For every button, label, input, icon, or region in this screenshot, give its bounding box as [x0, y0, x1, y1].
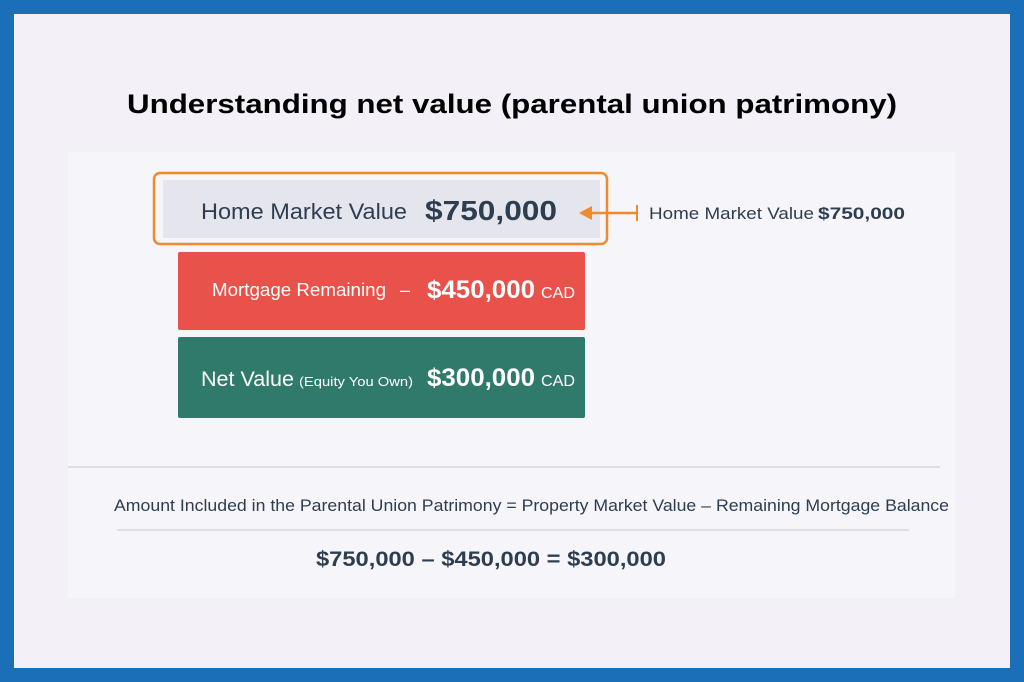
home market value box: [154, 173, 607, 244]
inner panel: [68, 152, 955, 598]
title: Understanding net value (parental union patrimony): [127, 89, 897, 119]
mortgage remaining box: –: [400, 280, 410, 300]
arrow: [579, 205, 637, 221]
net value box: (Equity You Own): [299, 374, 413, 389]
mortgage remaining box: $450,000: [427, 276, 535, 304]
calculation: $750,000 – $450,000 = $300,000: [316, 548, 666, 571]
callout label: $750,000: [818, 204, 905, 223]
mortgage remaining box: [178, 252, 585, 330]
mortgage remaining box: CAD: [541, 285, 575, 302]
net value box: CAD: [541, 373, 575, 390]
home market value box: $750,000: [425, 195, 557, 226]
mortgage remaining box: Mortgage Remaining: [212, 280, 386, 300]
home market value box: Home Market Value: [201, 199, 407, 224]
net value box: Net Value: [201, 368, 294, 391]
formula text: Amount Included in the Parental Union Patrimony = Property Market Value – Remaining Mortgage Balance: [114, 496, 949, 515]
callout label: Home Market Value: [649, 204, 814, 223]
net value box: $300,000: [427, 364, 535, 392]
callout label: [649, 204, 905, 223]
net value box: [178, 337, 585, 418]
